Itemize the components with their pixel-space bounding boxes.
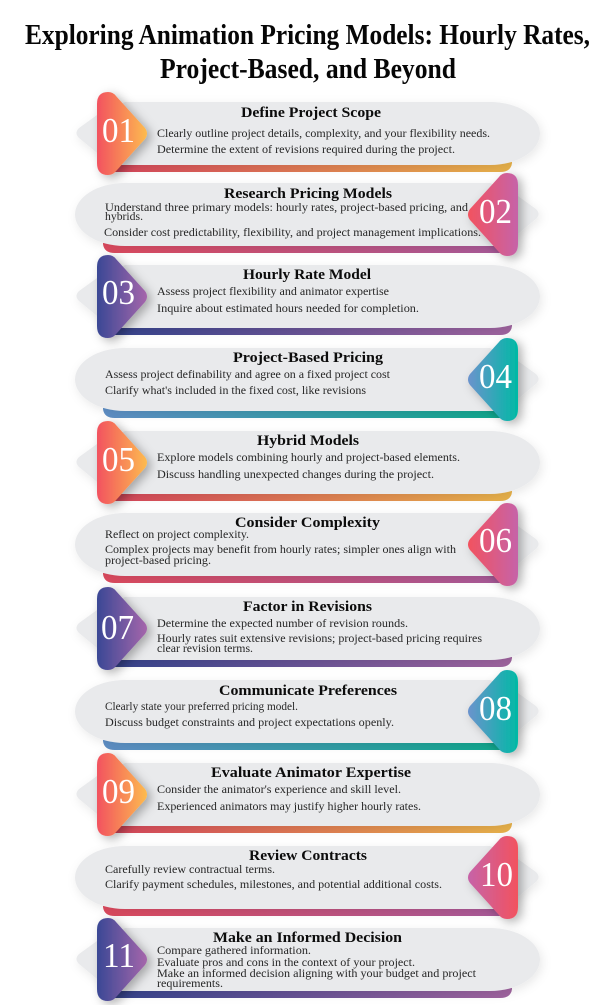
step 03: Hourly Rate Model	[76, 255, 540, 338]
step 05: Hybrid Models	[76, 421, 540, 504]
step 06: Consider Complexity: 06	[479, 521, 512, 560]
step 05: Hybrid Models: 05	[102, 440, 135, 479]
step 08: Communicate Preferences: Communicate Preferences	[219, 683, 397, 699]
step 04: Project-Based Pricing	[75, 338, 538, 421]
step 03: Hourly Rate Model: 03	[102, 273, 135, 312]
step 05: Hybrid Models: Discuss handling unexpected changes during the project.	[157, 468, 434, 481]
step 01: Define Project Scope: Clearly outline project details, complexity, and your flexibility needs.	[157, 127, 490, 140]
step 07: Factor in Revisions	[76, 587, 540, 670]
step 09: Evaluate Animator Expertise: Experienced animators may justify higher hourly rates.	[157, 800, 421, 813]
step 10: Review Contracts	[75, 836, 538, 919]
step 07: Factor in Revisions: 07	[101, 608, 134, 647]
step 02: Research Pricing Models	[75, 173, 538, 256]
step 02: Research Pricing Models: 02	[479, 192, 512, 231]
step 11: Make an Informed Decision: Evaluate pros and cons in the context of your project.	[157, 956, 415, 969]
step 08: Communicate Preferences: Clearly state your preferred pricing model.	[105, 700, 298, 713]
step 10: Review Contracts: Carefully review contractual terms.	[105, 863, 275, 876]
step 07: Factor in Revisions: Hourly rates suit extensive revisions; project-based pricing requires	[157, 632, 483, 645]
step 09: Evaluate Animator Expertise: 09	[102, 772, 135, 811]
step 05: Hybrid Models: Explore models combining hourly and project-based elements.	[157, 451, 460, 464]
step 04: Project-Based Pricing: Assess project definability and agree on a fixed project cost	[105, 368, 391, 381]
step 03: Hourly Rate Model: Inquire about estimated hours needed for completion.	[157, 302, 419, 315]
step 08: Communicate Preferences	[75, 670, 538, 753]
step 11: Make an Informed Decision	[76, 918, 540, 1001]
step 09: Evaluate Animator Expertise: Evaluate Animator Expertise	[211, 765, 412, 781]
step 08: Communicate Preferences: Discuss budget constraints and project expectations openly.	[105, 716, 394, 729]
title: Project-Based, and Beyond	[160, 54, 456, 85]
step 09: Evaluate Animator Expertise: Consider the animator's experience and skill level.	[157, 783, 401, 796]
step 11: Make an Informed Decision: 11	[103, 936, 135, 975]
step 01: Define Project Scope: Determine the extent of revisions required during the project.	[157, 143, 455, 156]
step 08: Communicate Preferences: 08	[479, 689, 512, 728]
title	[25, 20, 590, 85]
step 02: Research Pricing Models: hybrids.	[105, 210, 143, 223]
step 06: Consider Complexity: Consider Complexity	[235, 515, 381, 531]
step 03: Hourly Rate Model: Assess project flexibility and animator expertise	[157, 285, 389, 298]
step 11: Make an Informed Decision: requirements.	[157, 977, 223, 990]
step 10: Review Contracts: 10	[480, 855, 513, 894]
step 02: Research Pricing Models: Understand three primary models: hourly rates, project-based pricing, and	[105, 201, 468, 214]
step 11: Make an Informed Decision: Make an Informed Decision	[213, 930, 402, 946]
step 11: Make an Informed Decision: Compare gathered information.	[157, 944, 311, 957]
step 04: Project-Based Pricing: Project-Based Pricing	[233, 350, 384, 366]
step 10: Review Contracts: Clarify payment schedules, milestones, and potential additional costs.	[105, 878, 442, 891]
step 10: Review Contracts: Review Contracts	[249, 848, 367, 864]
step 06: Consider Complexity: project-based pricing.	[105, 554, 211, 567]
step 09: Evaluate Animator Expertise	[76, 753, 540, 836]
step 06: Consider Complexity	[75, 503, 538, 586]
step 02: Research Pricing Models: Research Pricing Models	[224, 186, 392, 202]
step 07: Factor in Revisions: Determine the expected number of revision rounds.	[157, 617, 408, 630]
step 11: Make an Informed Decision: Make an informed decision aligning with your budget and project	[157, 967, 477, 980]
step 01: Define Project Scope: 01	[102, 111, 135, 150]
step 06: Consider Complexity: Complex projects may benefit from hourly rates; simpler ones align with	[105, 543, 456, 556]
step 03: Hourly Rate Model: Hourly Rate Model	[243, 267, 371, 283]
step 07: Factor in Revisions: Factor in Revisions	[243, 599, 372, 615]
step 01: Define Project Scope: Define Project Scope	[241, 105, 382, 121]
step 06: Consider Complexity: Reflect on project complexity.	[105, 528, 249, 541]
step 02: Research Pricing Models: Consider cost predictability, flexibility, and project management implications.	[104, 226, 481, 239]
step 01: Define Project Scope	[76, 92, 540, 175]
step 05: Hybrid Models: Hybrid Models	[257, 433, 359, 449]
step 04: Project-Based Pricing: Clarify what's included in the fixed cost, like revisions	[105, 384, 366, 397]
step 07: Factor in Revisions: clear revision terms.	[157, 642, 253, 655]
step 04: Project-Based Pricing: 04	[479, 357, 512, 396]
